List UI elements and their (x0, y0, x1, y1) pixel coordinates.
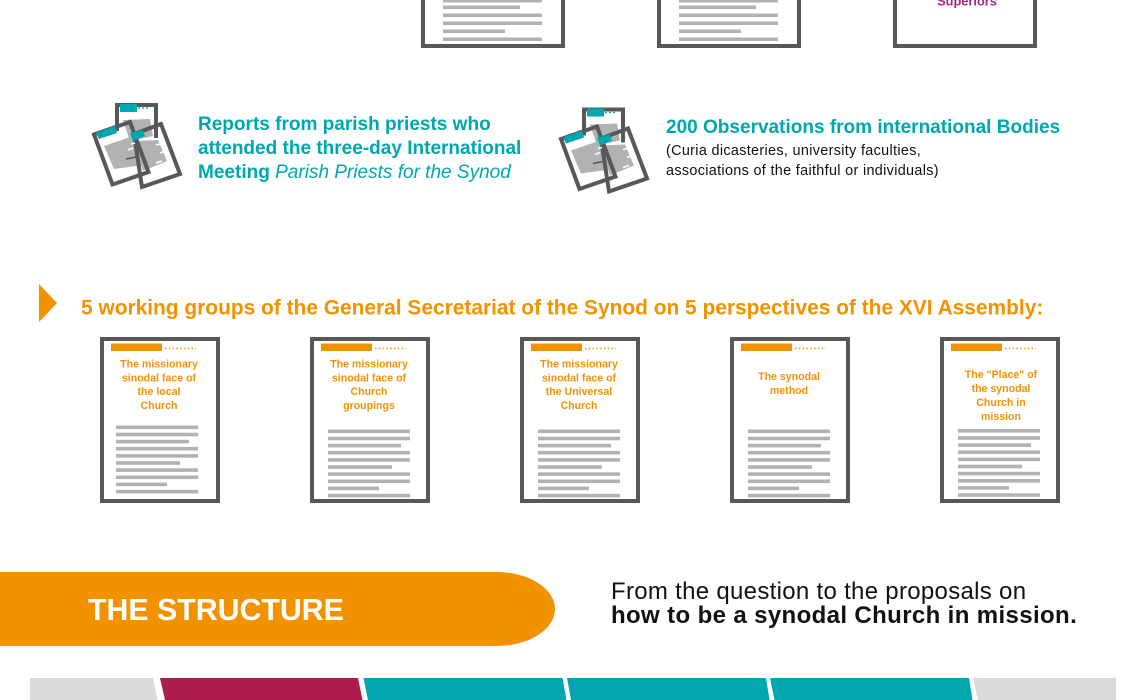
document: Church groupings: Church (350, 386, 388, 398)
document: synodal method (732, 339, 848, 501)
document: place of the synodal Church: mission (981, 411, 1021, 423)
document: local Church: Church (140, 400, 178, 412)
document: synodal method: The synodal (758, 371, 820, 383)
document: Universal Church: sinodal face of (542, 372, 617, 384)
text: reports from parish priests: attended the three-day International (198, 138, 521, 159)
document: place of the synodal Church: The "Place" of (965, 369, 1038, 381)
text: 200 observations: 200 Observations from international Bodies (666, 117, 1060, 138)
document: local Church: the local (138, 386, 181, 398)
document: Church groupings: sinodal face of (332, 372, 407, 384)
document: local Church: sinodal face of (122, 372, 197, 384)
document: place of the synodal Church: the synodal (972, 383, 1030, 395)
text: from the question to the proposals (611, 578, 1077, 629)
banner: the structure (0, 572, 555, 646)
document: top right, Superiors (895, 0, 1035, 46)
document: synodal method: method (770, 385, 808, 397)
text: 200 observations: (Curia dicasteries, university faculties, (666, 143, 921, 159)
document: Church groupings: The missionary (330, 358, 408, 370)
band: structure columns (30, 678, 1116, 700)
document: local Church: The missionary (120, 358, 198, 370)
arrow: orange marker (39, 284, 57, 322)
icon: stacked documents, parish priests (94, 104, 180, 187)
document: Church groupings: groupings (343, 400, 395, 412)
text: reports from parish priests: Reports from parish priests who (198, 114, 491, 135)
document: place of the synodal Church (942, 339, 1058, 501)
icon: stacked documents, observations (561, 108, 647, 192)
document: Universal Church: The missionary (540, 358, 618, 370)
document: top middle (cropped) (659, 0, 799, 46)
heading: working groups: 5 working groups of the General Secretariat of the Synod on 5 perspectives of the XVI Assembly: (81, 296, 1043, 320)
text: reports from parish priests: Meeting Parish Priests for the Synod (198, 162, 512, 183)
banner: the structure: THE STRUCTURE (88, 594, 344, 627)
text: from the question to the proposals: From the question to the proposals on (611, 578, 1026, 605)
document: Universal Church: the Universal (546, 386, 612, 398)
text: reports from parish priests (198, 114, 521, 183)
document: Universal Church (522, 339, 638, 501)
text: 200 observations (666, 117, 1060, 179)
document: Universal Church: Church (560, 400, 598, 412)
document: top left (cropped) (423, 0, 563, 46)
document: Church groupings (312, 339, 428, 501)
document: local Church (102, 339, 218, 501)
text: 200 observations: associations of the faithful or individuals) (666, 163, 939, 179)
text: from the question to the proposals: how to be a synodal Church in mission. (611, 602, 1077, 629)
document: place of the synodal Church: Church in (976, 397, 1026, 409)
